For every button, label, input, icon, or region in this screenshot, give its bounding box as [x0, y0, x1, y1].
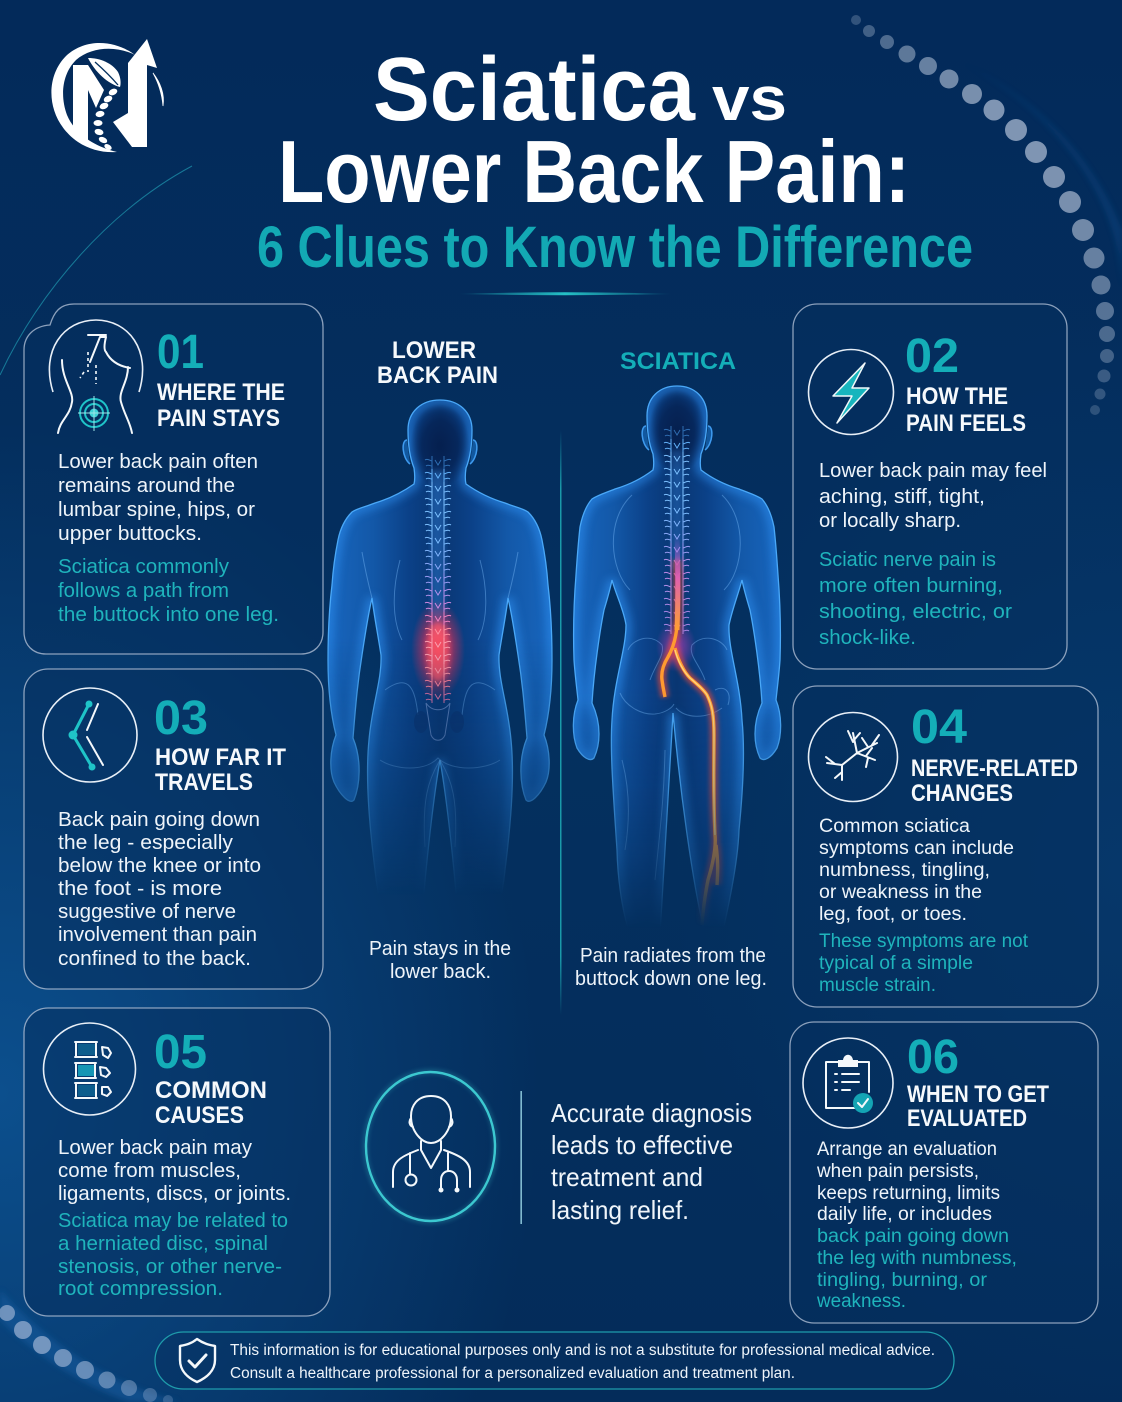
text: sciatica: shock-like.	[819, 626, 916, 649]
heading: HOW THE	[906, 383, 1008, 410]
text: accurate diagnosis: leads to effective	[551, 1130, 733, 1160]
dot arc: bottom left	[0, 1305, 173, 1402]
text: when	[816, 1139, 1000, 1225]
icon: doctor with stethoscope	[366, 1072, 496, 1222]
icon: nerve cell	[808, 712, 898, 802]
figure: sciatica body	[573, 386, 781, 935]
text: lower back: come from muscles,	[58, 1159, 241, 1182]
heading: COMMON	[155, 1077, 267, 1104]
text: accurate diagnosis	[551, 1098, 752, 1225]
text: note	[819, 931, 1029, 996]
decorative arc line	[0, 166, 192, 375]
text: sciatica: shooting, electric, or	[819, 600, 1012, 623]
title underline	[460, 292, 670, 295]
label: lower back pain	[377, 337, 498, 389]
icon: shield check	[180, 1339, 215, 1382]
text: sciatica: Sciatica may be related to	[58, 1209, 288, 1232]
heading: CAUSES	[155, 1102, 244, 1129]
number: 04	[911, 701, 967, 754]
title	[278, 40, 910, 221]
text: sciatica: Sciatica commonly	[58, 555, 230, 578]
panel: 03 how far it travels	[24, 669, 323, 989]
text: body: suggestive of nerve	[58, 900, 236, 923]
label: lower back pain: BACK PAIN	[377, 362, 498, 389]
number: 06	[907, 1031, 959, 1084]
text: warning signs: tingling, burning, or	[817, 1270, 988, 1291]
panel: 05 common causes	[24, 1008, 330, 1316]
text: symptoms: numbness, tingling,	[819, 860, 990, 881]
label: sciatica: SCIATICA	[620, 348, 736, 375]
text: warning signs: weakness.	[816, 1291, 906, 1312]
disclaimer bar	[155, 1332, 954, 1389]
icon: lightning bolt	[808, 350, 894, 434]
panel: 06 when to get evaluated	[790, 1022, 1098, 1323]
heading: WHEN TO GET	[907, 1081, 1049, 1108]
title: vs	[712, 65, 787, 134]
text: lower back: ligaments, discs, or joints.	[58, 1182, 291, 1205]
subtitle: 6 Clues to Know the Difference	[257, 215, 973, 280]
number: 01	[157, 326, 204, 379]
text: symptoms: or weakness in the	[819, 882, 982, 903]
caption: sciatica: buttock down one leg.	[575, 968, 767, 990]
text: lower back: aching, stiff, tight,	[819, 485, 985, 508]
caption: lower back pain: Pain stays in the	[369, 938, 511, 960]
text: lower back: Lower back pain may feel	[819, 459, 1047, 482]
text: body: Back pain going down	[58, 808, 260, 831]
heading: CHANGES	[911, 780, 1013, 807]
number: 05	[154, 1026, 207, 1079]
text: symptoms: leg, foot, or toes.	[819, 904, 967, 925]
text: warning signs: back pain going down	[817, 1226, 1009, 1247]
icon: clipboard	[803, 1038, 893, 1128]
caption: sciatica	[575, 945, 767, 990]
text: body: confined to the back.	[58, 947, 251, 970]
heading	[155, 1077, 267, 1129]
text: when: Arrange an evaluation	[817, 1139, 997, 1160]
text: when: daily life, or includes	[817, 1204, 992, 1225]
sciatic nerve	[662, 535, 718, 925]
text: lower back: or locally sharp.	[819, 509, 961, 532]
text: lower back: Lower back pain often	[58, 450, 258, 473]
heading	[157, 379, 285, 432]
heading: PAIN FEELS	[906, 410, 1026, 437]
number: 02	[905, 330, 959, 383]
text: lower back: upper buttocks.	[58, 522, 202, 545]
text: accurate diagnosis: lasting relief.	[551, 1195, 689, 1225]
text: warning signs	[816, 1226, 1017, 1312]
heading: WHERE THE	[157, 379, 285, 406]
heading: PAIN STAYS	[157, 405, 280, 432]
icon: back with target	[49, 320, 143, 433]
text: body: involvement than pain	[58, 923, 257, 946]
heading	[911, 755, 1078, 807]
heading: HOW FAR IT	[155, 744, 286, 771]
text: sciatica	[819, 548, 1012, 649]
caption: sciatica: Pain radiates from the	[580, 945, 766, 967]
text: lower back	[58, 450, 258, 545]
text: when: when pain persists,	[816, 1161, 979, 1182]
text: sciatica: Sciatic nerve pain is	[819, 548, 996, 571]
text: body	[58, 808, 261, 970]
text: sciatica: a herniated disc, spinal	[58, 1232, 268, 1255]
text: accurate diagnosis: Accurate diagnosis	[551, 1098, 752, 1128]
heading: NERVE-RELATED	[911, 755, 1078, 782]
title: Lower Back Pain:	[278, 122, 910, 221]
icon: vertebrae	[44, 1023, 136, 1115]
disclaimer text: Consult a healthcare professional for a personalized evaluation and treatment plan.	[230, 1365, 795, 1382]
text: sciatica	[58, 1209, 288, 1300]
heading	[907, 1081, 1049, 1132]
disclaimer text: This information is for educational purposes only and is not a substitute for professional medical advice.	[230, 1342, 935, 1359]
heading	[155, 744, 286, 796]
figure: lower back pain body	[328, 400, 552, 935]
text: symptoms	[819, 816, 1014, 925]
text: lower back	[819, 459, 1047, 532]
heading	[906, 383, 1026, 437]
disclaimer text	[230, 1342, 935, 1382]
label: lower back pain: LOWER	[392, 337, 476, 364]
text: warning signs: the leg with numbness,	[817, 1248, 1017, 1269]
title: Sciatica	[373, 40, 696, 140]
center divider	[560, 430, 562, 1015]
text: body: the leg - especially	[58, 831, 234, 854]
text: note: These symptoms are not	[819, 931, 1029, 952]
text: body: the foot - is more	[58, 877, 222, 900]
heading: EVALUATED	[907, 1105, 1027, 1132]
caption: lower back pain: lower back.	[390, 961, 491, 983]
text: symptoms: Common sciatica	[819, 816, 970, 837]
text: sciatica: follows a path from	[58, 579, 229, 602]
text: body: below the knee or into	[58, 854, 261, 877]
heading: TRAVELS	[155, 769, 253, 796]
text: note: muscle strain.	[819, 975, 936, 996]
icon: bent leg path	[43, 688, 137, 782]
text: lower back	[58, 1136, 291, 1205]
text: sciatica	[58, 555, 279, 626]
text: lower back: lumbar spine, hips, or	[58, 498, 255, 521]
text: sciatica: more often burning,	[819, 574, 1003, 597]
caption: lower back pain	[369, 938, 511, 983]
text: lower back: Lower back pain may	[58, 1136, 253, 1159]
text: symptoms: symptoms can include	[819, 838, 1014, 859]
text: sciatica: stenosis, or other nerve-	[58, 1255, 282, 1278]
logo	[51, 39, 163, 152]
number: 03	[154, 692, 208, 745]
text: sciatica: the buttock into one leg.	[58, 603, 279, 626]
quote divider	[520, 1091, 522, 1224]
text: lower back: remains around the	[58, 474, 235, 497]
panel: 02 how the pain feels	[793, 304, 1067, 669]
text: sciatica: root compression.	[58, 1277, 223, 1300]
dot arc: top right	[851, 15, 1115, 415]
text: note: typical of a simple	[819, 953, 973, 974]
panel: 01 where the pain stays	[24, 304, 323, 654]
text: accurate diagnosis: treatment and	[551, 1162, 703, 1192]
text: when: keeps returning, limits	[817, 1183, 1000, 1204]
panel: 04 nerve-related changes	[793, 686, 1098, 1007]
